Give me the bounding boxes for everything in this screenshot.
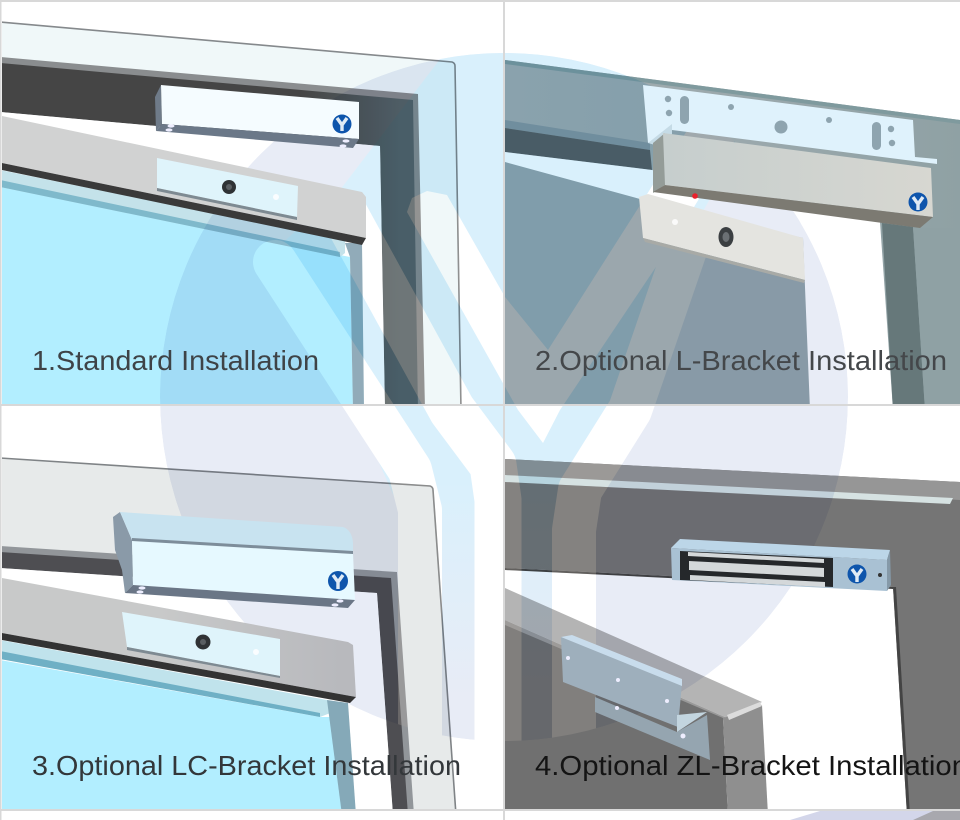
caption: standard: 1.Standard Installation: [32, 345, 319, 376]
panel 1: magnetic lock: [155, 85, 359, 148]
next-row fragment: [790, 811, 960, 820]
panel 1: frame and glass: [0, 22, 461, 410]
door glass: [0, 640, 356, 815]
door leaf: [505, 162, 810, 410]
door glass: [0, 170, 364, 410]
panel 3: armature plate: [122, 612, 280, 678]
panel 1: armature plate: [157, 158, 298, 220]
panel 3: door rail: [2, 578, 356, 703]
panel 2: armature plate: [639, 194, 805, 283]
wall and door frame: [505, 60, 960, 410]
caption: L-bracket: 2.Optional L-Bracket Installation: [535, 345, 947, 376]
panel 3: LC-bracket lock: [113, 512, 355, 608]
watermark white Y strokes: [267, 194, 608, 741]
icon: brand logo: [332, 114, 352, 134]
watermark: circular Y logo: [160, 50, 848, 745]
door frame: [0, 458, 456, 815]
watermark disc and blue Y field: [160, 50, 848, 745]
panel 1: door rail: [2, 116, 366, 245]
panel 4: ZL-bracket: [561, 635, 710, 760]
door leaf: [505, 588, 768, 815]
icon: brand logo: [848, 564, 866, 584]
icon: brand logo: [908, 192, 928, 212]
door frame: [0, 22, 461, 410]
wall and door frame: [505, 459, 960, 815]
panel 4: wall and door: [505, 459, 960, 815]
icon: brand logo: [328, 571, 348, 591]
caption: ZL-bracket: 4.Optional ZL-Bracket Installation: [535, 750, 960, 781]
panel 3: frame and glass: [0, 458, 456, 815]
caption: LC-bracket: 3.Optional LC-Bracket Installation: [32, 750, 461, 781]
panel 2: L-bracket: [643, 85, 937, 164]
panel 4: magnetic lock with armature face: [671, 539, 891, 591]
panel 2: electromagnetic lock body: [653, 133, 933, 228]
panel 2: wall and door: [505, 60, 960, 410]
